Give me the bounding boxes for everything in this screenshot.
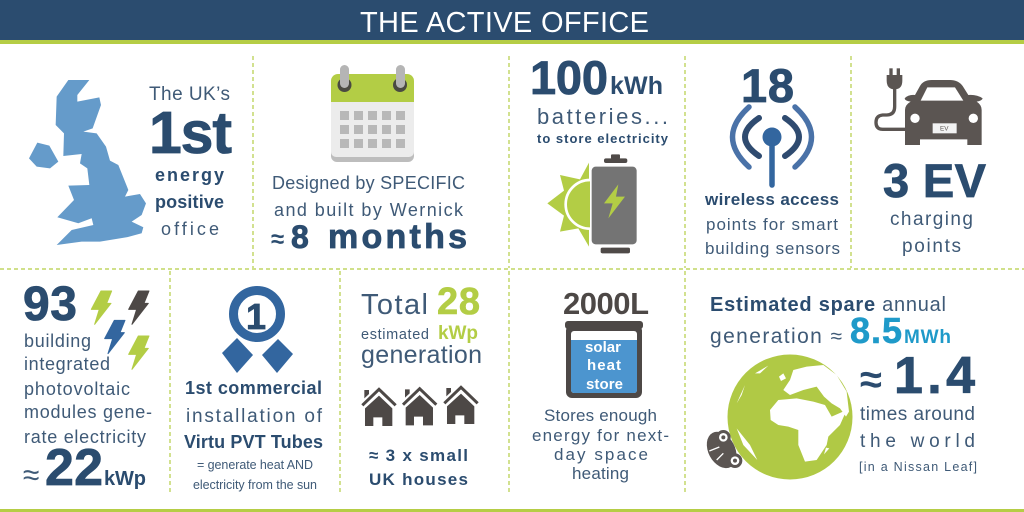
- text: stores enough: Stores enough: [544, 406, 657, 425]
- icon: battery: [592, 154, 637, 253]
- text: integrated: integrated: [24, 354, 110, 374]
- text: energy: energy: [155, 165, 224, 185]
- text: 3 x small: ≈ 3 x small: [369, 446, 468, 465]
- text: 93: 93: [23, 278, 77, 331]
- text: 1.4: 1.4: [894, 347, 975, 405]
- panel: UK first: [29, 80, 232, 245]
- text: 8.5: 8.5: [850, 310, 902, 351]
- text: generate heat and: = generate heat AND: [197, 458, 313, 472]
- text: kWp: kWp: [104, 468, 146, 490]
- text: estimated: estimated: [361, 327, 429, 343]
- text: day space: day space: [554, 445, 648, 464]
- icon: UK map: [29, 80, 146, 245]
- text: electricity from sun: electricity from the sun: [193, 478, 317, 492]
- icon: heat store tank: solar: [585, 339, 621, 356]
- text: installation of: installation of: [186, 406, 323, 427]
- panel: batteries: [530, 51, 669, 253]
- icon: EV car and plug: [876, 68, 983, 145]
- text: approx sign: ≈: [23, 459, 39, 492]
- icon: EV car and plug: EV: [940, 126, 949, 133]
- text: points for smart: points for smart: [706, 215, 838, 234]
- text: estimated spare annual: Estimated spare annual: [710, 294, 946, 316]
- text: generation approx: generation ≈: [710, 325, 842, 348]
- title banner: THE ACTIVE OFFICE: [360, 7, 649, 39]
- panel: EV charging: [876, 68, 987, 257]
- text: 100: 100: [530, 51, 608, 104]
- icon: lightning bolts: [91, 291, 149, 369]
- icon: award rosette: [222, 290, 293, 373]
- text: The UK's: The UK’s: [149, 84, 230, 105]
- icon: calendar: [331, 65, 414, 162]
- text: building: building: [24, 331, 91, 351]
- panel: spare generation: [701, 294, 977, 480]
- text: charging: charging: [890, 209, 973, 230]
- text: UK houses: UK houses: [369, 470, 468, 489]
- text: designed by: Designed by SPECIFIC: [272, 173, 465, 193]
- text: 8 months: months: [328, 218, 467, 256]
- text: built by: and built by Wernick: [274, 200, 464, 220]
- text: energy for next: energy for next-: [532, 426, 669, 445]
- text: to store electricity: to store electricity: [537, 131, 669, 146]
- icon: houses: [362, 387, 478, 426]
- text: positive: positive: [155, 192, 224, 212]
- panel: calendar: [271, 65, 467, 256]
- text: 2000L: 2000L: [563, 286, 649, 321]
- text: times around: times around: [860, 404, 975, 425]
- icon: heat store tank: [565, 321, 643, 398]
- icon: small car: [701, 427, 743, 473]
- text: 28: 28: [437, 281, 480, 323]
- title banner: [0, 0, 1024, 44]
- text: 3 EV: 3 EV: [883, 154, 987, 207]
- panel: solar heat store: [532, 286, 669, 483]
- text: the world: the world: [860, 431, 975, 452]
- text: 22: 22: [45, 439, 103, 497]
- icon: sun: [547, 163, 590, 247]
- text: 8 months: ≈: [271, 226, 284, 253]
- text: approx sign large: ≈: [860, 358, 882, 402]
- icon: heat store tank: heat: [587, 357, 621, 374]
- text: Virtu PVT Tubes: Virtu PVT Tubes: [184, 432, 323, 452]
- text: wireless access: wireless access: [704, 190, 839, 209]
- text: kWh: kWh: [610, 72, 663, 100]
- panel: total generation: [361, 281, 482, 489]
- icon: wireless signal: [732, 107, 812, 185]
- panel: commercial installation: [184, 290, 323, 492]
- text: 1st: 1st: [149, 100, 232, 166]
- text: photovoltaic: photovoltaic: [24, 379, 130, 399]
- text: 18: 18: [741, 59, 794, 112]
- text: modules generate: modules gene-: [24, 402, 152, 422]
- panel: wireless access: [704, 59, 840, 258]
- panel: photovoltaic modules: [23, 278, 152, 497]
- text: heating: heating: [572, 464, 629, 483]
- icon: award rosette: 1: [246, 296, 266, 337]
- text: office: office: [161, 219, 219, 239]
- text: batteries: batteries...: [537, 104, 668, 129]
- text: in a Nissan Leaf: [in a Nissan Leaf]: [859, 460, 977, 474]
- text: points: points: [902, 236, 961, 257]
- icon: globe: [728, 354, 852, 480]
- text: MWh: MWh: [904, 327, 951, 348]
- text: building sensors: building sensors: [705, 239, 840, 258]
- text: 8 months: 8: [291, 219, 309, 255]
- text: generation: generation: [361, 341, 482, 369]
- text: kWp green: kWp: [438, 323, 478, 344]
- text: Total: Total: [361, 289, 428, 321]
- icon: heat store tank: store: [586, 376, 623, 393]
- text: 1st commercial: 1st commercial: [185, 378, 322, 398]
- text: rate electricity: rate electricity: [24, 427, 146, 447]
